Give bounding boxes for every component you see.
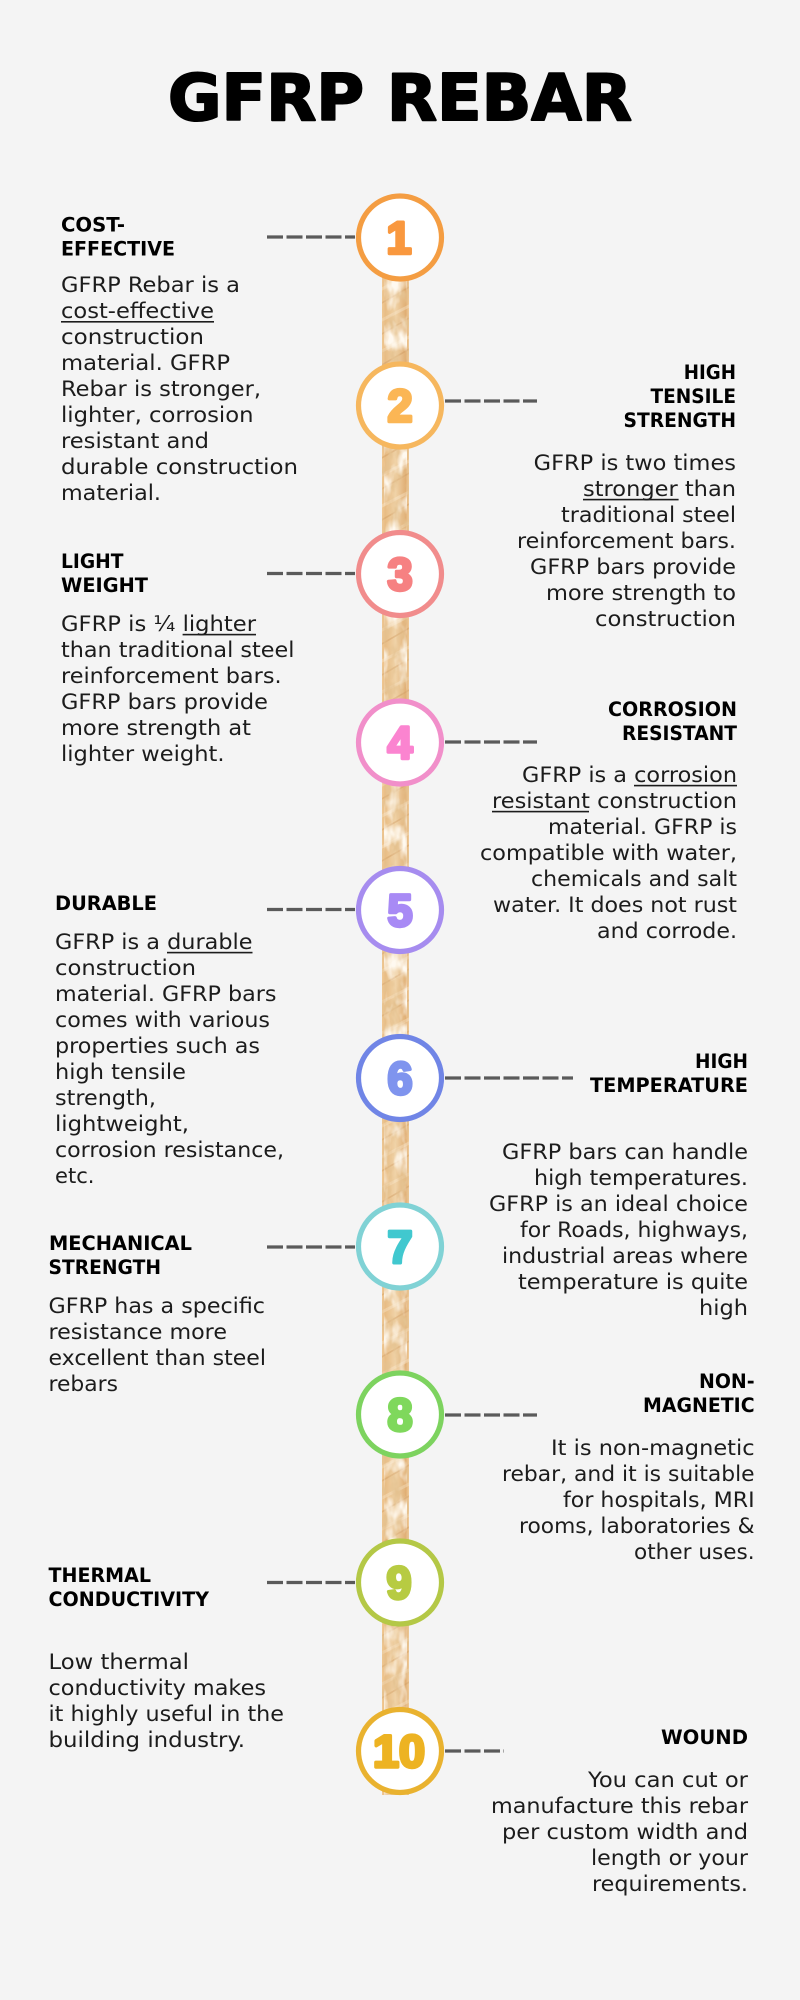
heading: high tensile strength <box>624 361 736 432</box>
marker 2: 2 <box>387 380 413 432</box>
connector 6 <box>445 1076 573 1080</box>
body: light weight: reinforcement bars. <box>61 664 282 688</box>
body: thermal conductivity: Low thermal <box>48 1650 189 1674</box>
marker 10: 10 <box>373 1726 425 1777</box>
marker 6 <box>358 1036 442 1120</box>
body: cost-effective: lighter, corrosion <box>61 403 253 427</box>
body: non-magnetic: rebar, and it is suitable <box>502 1462 755 1486</box>
panel: corrosion resistant <box>480 698 738 943</box>
body: thermal conductivity: conductivity makes <box>48 1676 266 1700</box>
heading: mechanical strength: MECHANICAL <box>49 1232 192 1255</box>
marker 3 <box>358 532 442 616</box>
heading: thermal conductivity <box>48 1564 210 1611</box>
body: wound: per custom width and <box>502 1820 748 1844</box>
body: corrosion resistant: chemicals and salt <box>531 867 737 891</box>
connector 9 <box>267 1581 355 1584</box>
marker 4 <box>358 701 442 784</box>
body: corrosion resistant: water. It does not rust <box>493 893 737 917</box>
body: high temperature: high temperatures. <box>534 1166 748 1190</box>
body: high tensile strength: GFRP bars provide <box>530 555 736 579</box>
title: GFRP REBAR <box>168 62 632 136</box>
body: high tensile strength: more strength to <box>546 581 736 605</box>
heading: thermal conductivity: THERMAL <box>48 1564 151 1587</box>
heading: corrosion resistant: CORROSION <box>608 698 737 721</box>
body: high tensile strength: GFRP is two times <box>534 451 736 475</box>
body: high temperature: GFRP is an ideal choice <box>489 1192 748 1216</box>
body: cost-effective: GFRP Rebar is a <box>61 273 240 297</box>
body: cost-effective: material. <box>61 481 161 505</box>
body: light weight: than traditional steel <box>61 638 294 662</box>
rebar rod <box>382 270 409 1795</box>
marker 7: 7 <box>387 1222 413 1272</box>
heading: high tensile strength: HIGH <box>684 361 736 384</box>
body: durable: etc. <box>55 1164 94 1188</box>
body: mechanical strength: GFRP has a specific <box>48 1294 265 1318</box>
body: light weight: more strength at <box>61 716 251 740</box>
marker 1: 1 <box>386 212 412 264</box>
body: light weight: GFRP bars provide <box>61 690 268 714</box>
body: high temperature: for Roads, highways, <box>520 1218 748 1242</box>
body: light weight: lighter weight. <box>61 742 224 766</box>
heading: thermal conductivity: CONDUCTIVITY <box>48 1588 210 1611</box>
body: mechanical strength: rebars <box>48 1372 118 1396</box>
body: mechanical strength: resistance more <box>48 1320 227 1344</box>
marker 10 <box>358 1710 442 1792</box>
body: non-magnetic <box>502 1436 755 1564</box>
marker 3: 3 <box>387 549 413 600</box>
body: wound <box>491 1768 748 1896</box>
body: wound: manufacture this rebar <box>491 1794 748 1818</box>
body: cost-effective: cost-effective <box>61 299 214 323</box>
heading: light weight: WEIGHT <box>61 574 149 597</box>
panel: high tensile strength <box>517 361 736 631</box>
body: high tensile strength: reinforcement bars. <box>517 529 736 553</box>
body: corrosion resistant <box>480 763 737 943</box>
connector 5 <box>267 908 355 911</box>
body: high temperature: GFRP bars can handle <box>502 1140 748 1164</box>
connector 2 <box>445 399 537 403</box>
marker 5 <box>358 868 442 952</box>
body: high temperature: high <box>699 1296 748 1320</box>
body: high temperature: temperature is quite <box>518 1270 748 1294</box>
body: corrosion resistant: GFRP is a corrosion <box>522 763 737 787</box>
marker 8 <box>358 1373 442 1456</box>
body: non-magnetic: for hospitals, MRI <box>563 1488 755 1512</box>
panel: non-magnetic <box>502 1370 755 1564</box>
panel: wound <box>491 1726 748 1896</box>
heading: light weight <box>61 550 149 597</box>
heading: durable: DURABLE <box>55 892 157 915</box>
heading: high temperature <box>590 1050 748 1097</box>
body: non-magnetic: rooms, laboratories & <box>519 1514 755 1538</box>
heading: non-magnetic: NON- <box>699 1370 755 1393</box>
connector 8 <box>445 1413 537 1417</box>
body: thermal conductivity: it highly useful in the <box>48 1702 284 1726</box>
body: cost-effective <box>61 273 298 505</box>
body: wound: You can cut or <box>587 1768 748 1792</box>
marker 5: 5 <box>387 885 413 936</box>
body: durable: lightweight, <box>55 1112 189 1136</box>
body: wound: requirements. <box>592 1872 748 1896</box>
body: non-magnetic: It is non-magnetic <box>551 1436 755 1460</box>
body: high tensile strength: traditional steel <box>561 503 736 527</box>
marker 6: 6 <box>387 1053 413 1104</box>
panel: mechanical strength <box>48 1232 266 1396</box>
body: high tensile strength: construction <box>595 607 736 631</box>
heading: corrosion resistant <box>608 698 738 745</box>
body: durable: GFRP is a durable <box>55 930 252 954</box>
body: cost-effective: Rebar is stronger, <box>61 377 261 401</box>
marker 9: 9 <box>386 1558 412 1608</box>
body: cost-effective: resistant and <box>61 429 209 453</box>
body: wound: length or your <box>591 1846 748 1870</box>
heading: cost-effective <box>61 214 175 260</box>
heading: high temperature: TEMPERATURE <box>590 1074 748 1097</box>
body: thermal conductivity <box>48 1650 284 1752</box>
heading: cost-effective: COST- <box>61 214 125 236</box>
heading: non-magnetic <box>643 1370 755 1417</box>
heading: corrosion resistant: RESISTANT <box>622 722 738 745</box>
connector 1 <box>267 235 355 239</box>
marker 8: 8 <box>387 1390 413 1440</box>
body: high temperature: industrial areas where <box>502 1244 748 1268</box>
body: corrosion resistant: material. GFRP is <box>548 815 737 839</box>
body: high tensile strength <box>517 451 736 631</box>
body: durable: strength, <box>55 1086 156 1110</box>
heading: high tensile strength: TENSILE <box>650 385 736 408</box>
body: durable: construction <box>55 956 196 980</box>
body: durable: corrosion resistance, <box>55 1138 284 1162</box>
body: high temperature <box>489 1140 748 1320</box>
body: mechanical strength: excellent than steel <box>48 1346 266 1370</box>
body: light weight: GFRP is ¼ lighter <box>61 612 256 636</box>
heading: cost-effective: EFFECTIVE <box>61 238 175 260</box>
panel: light weight <box>61 550 294 766</box>
heading: wound: WOUND <box>661 1726 748 1749</box>
body: cost-effective: material. GFRP <box>61 351 230 375</box>
connector 10 <box>445 1749 504 1753</box>
heading: light weight: LIGHT <box>61 550 124 573</box>
panel: thermal conductivity <box>48 1564 284 1752</box>
body: light weight <box>61 612 294 766</box>
body: durable: properties such as <box>55 1034 260 1058</box>
heading: high tensile strength: STRENGTH <box>624 409 736 432</box>
marker 9 <box>358 1541 442 1624</box>
body: cost-effective: durable construction <box>61 455 298 479</box>
panel: high temperature <box>489 1050 748 1320</box>
body: durable: material. GFRP bars <box>55 982 276 1006</box>
marker 1 <box>358 196 442 279</box>
body: high tensile strength: stronger than <box>583 477 736 501</box>
marker 2 <box>358 364 442 447</box>
connector 4 <box>445 740 537 744</box>
heading: high temperature: HIGH <box>695 1050 748 1073</box>
body: durable: comes with various <box>55 1008 270 1032</box>
body: corrosion resistant: and corrode. <box>597 919 737 943</box>
body: corrosion resistant: compatible with water, <box>480 841 737 865</box>
heading: mechanical strength: STRENGTH <box>48 1256 161 1279</box>
body: mechanical strength <box>48 1294 266 1396</box>
panel: durable <box>55 892 284 1188</box>
body: thermal conductivity: building industry. <box>48 1728 245 1752</box>
body: cost-effective: construction <box>61 325 204 349</box>
body: durable: high tensile <box>55 1060 186 1084</box>
body: durable <box>55 930 284 1188</box>
marker 7 <box>358 1205 442 1288</box>
body: corrosion resistant: resistant construction <box>492 789 737 813</box>
body: non-magnetic: other uses. <box>634 1540 755 1564</box>
connector 7 <box>267 1245 355 1249</box>
marker 4: 4 <box>387 718 413 768</box>
panel: cost-effective <box>61 214 298 505</box>
connector 3 <box>267 572 355 575</box>
heading: non-magnetic: MAGNETIC <box>643 1394 755 1417</box>
heading: mechanical strength <box>48 1232 192 1279</box>
